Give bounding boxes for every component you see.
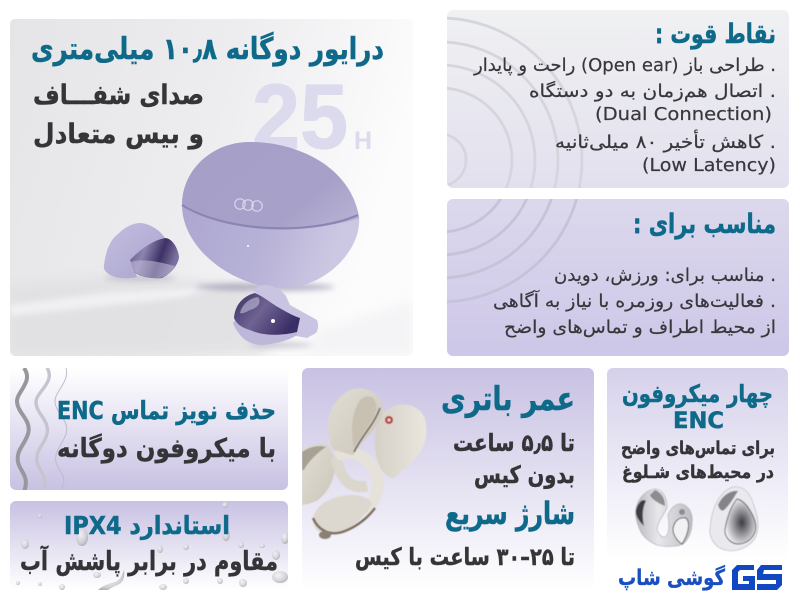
IPX4 subtitle: مقاوم در برابر پاشش آب [20, 545, 278, 577]
chrome earbud right [710, 487, 758, 551]
hero subtitle line 1: صدای شفـــاف [33, 80, 204, 111]
battery line 2: بدون کیس [474, 461, 575, 489]
suitable line 3: از محیط اطراف و تماس‌های واضح [504, 317, 776, 338]
hero background [10, 19, 413, 356]
panel background [447, 199, 789, 356]
panel: battery life [302, 368, 594, 590]
panel: strengths [447, 10, 789, 188]
ENC subtitle: با میکروفون دوگانه [57, 433, 276, 464]
panel background [10, 368, 288, 490]
fast charge line: تا ۲۵–۳۰ ساعت با کیس [355, 543, 575, 571]
panel background [607, 368, 788, 560]
hero subtitle line 2: و بیس متعادل [33, 119, 204, 150]
strength line 3: (Dual Connection) [595, 104, 772, 125]
microphone line 2: در محیط‌های شـلوغ [622, 462, 774, 483]
fast charge heading: شارژ سریع [445, 496, 575, 532]
strength line 4: . کاهش تأخیر ۸۰ میلی‌ثانیه [555, 129, 776, 153]
panel background [447, 10, 789, 188]
background number 25H: 25 [252, 66, 348, 168]
battery line 1: تا ۵٫۵ ساعت [453, 429, 575, 457]
charging case [182, 142, 359, 291]
cream earbuds [302, 388, 426, 539]
suitable line 1: . مناسب برای: ورزش، دویدن [554, 265, 776, 286]
logo wordmark: گوشی شاپ [618, 564, 725, 591]
strength line 1: . طراحی باز (Open ear) راحت و پایدار [473, 55, 776, 76]
logo: Gooshi Shop [618, 564, 782, 591]
panel: ENC noise cancelling [10, 368, 288, 492]
suitable line 2: . فعالیت‌های روزمره با نیاز به آگاهی [493, 289, 776, 312]
chrome earbud left [636, 489, 692, 546]
sound rings [447, 16, 584, 188]
strength line 5: (Low Latency) [642, 155, 776, 176]
case logo [235, 199, 262, 211]
battery heading: عمر باتری [441, 379, 575, 419]
logo mark [732, 565, 782, 590]
left earbud [104, 223, 179, 281]
sound rings [447, 199, 578, 303]
panel background [302, 368, 594, 590]
front earbud [233, 285, 318, 348]
panel background [10, 501, 288, 590]
IPX4 heading: استاندارد IPX4 [64, 511, 230, 540]
water droplets [16, 502, 289, 590]
ENC heading: حذف نویز تماس ENC [57, 396, 276, 426]
panel: hero driver [10, 19, 413, 356]
wave lines [17, 368, 67, 492]
hero title: درایور دوگانه ۱۰٫۸ میلی‌متری [31, 31, 384, 67]
background number 25H: H [354, 127, 372, 155]
panel: four microphones [607, 368, 788, 560]
strength line 2: . اتصال هم‌زمان به دو دستگاه [529, 80, 776, 102]
panel: suitable for [447, 199, 789, 356]
panel: IPX4 water resistance [10, 501, 289, 590]
ENC label: ENC [673, 409, 724, 434]
